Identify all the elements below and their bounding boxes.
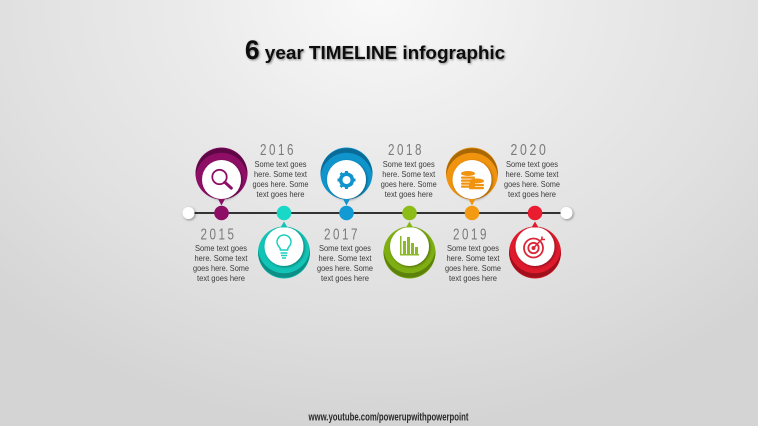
text block 2016: Some text goes xyxy=(254,160,306,169)
icon: coins xyxy=(461,171,484,189)
text block 2019: Some text goes xyxy=(447,244,499,253)
text block 2015 xyxy=(193,244,249,283)
text block 2015: Some text goes xyxy=(195,244,247,253)
year label 2019: 2019 xyxy=(453,226,489,244)
year label 2015: 2015 xyxy=(200,226,236,244)
icon: gear xyxy=(338,171,356,189)
timeline line xyxy=(188,212,567,214)
text block 2019: goes here. Some xyxy=(445,264,501,273)
icon: target xyxy=(524,236,545,258)
icon: bar chart xyxy=(400,236,419,256)
text block 2017 xyxy=(317,244,373,283)
text block 2019 xyxy=(445,244,501,283)
text block 2018: goes here. Some xyxy=(381,180,437,189)
milestone 2016 xyxy=(258,206,310,278)
text block 2020 xyxy=(504,160,560,199)
text block 2018 xyxy=(381,160,437,199)
text block 2015: here. Some text xyxy=(194,254,248,263)
year label 2020: 2020 xyxy=(510,142,548,159)
year label 2016: 2016 xyxy=(260,142,296,159)
year label 2017: 2017 xyxy=(324,226,360,244)
text block 2020: goes here. Some xyxy=(504,180,560,189)
milestone 2018 xyxy=(384,206,436,278)
milestone 2017 xyxy=(320,148,372,220)
text block 2017: Some text goes xyxy=(319,244,371,253)
text block 2017: text goes here xyxy=(321,274,369,283)
text block 2019: here. Some text xyxy=(446,254,500,263)
text block 2017: goes here. Some xyxy=(317,264,373,273)
text block 2018: Some text goes xyxy=(383,160,435,169)
text block 2015: text goes here xyxy=(197,274,245,283)
footer url: www.youtube.com/powerupwithpowerpoint xyxy=(308,412,469,424)
milestone 2020 xyxy=(509,206,561,278)
title: 6 year TIMELINE infographic xyxy=(245,35,505,65)
text block 2017: here. Some text xyxy=(318,254,372,263)
text block 2018: text goes here xyxy=(385,190,433,199)
end point xyxy=(560,207,572,219)
icon: magnifier xyxy=(212,170,231,188)
milestone 2019 xyxy=(446,148,498,220)
text block 2020: here. Some text xyxy=(506,170,559,179)
text block 2020: Some text goes xyxy=(506,160,558,169)
text block 2016: goes here. Some xyxy=(252,180,309,189)
icon: light bulb xyxy=(277,235,291,258)
start point xyxy=(182,207,194,219)
text block 2016 xyxy=(252,160,309,199)
text block 2016: here. Some text xyxy=(254,170,308,179)
text block 2018: here. Some text xyxy=(382,170,436,179)
text block 2016: text goes here xyxy=(256,190,305,199)
milestone 2015 xyxy=(196,148,248,220)
text block 2019: text goes here xyxy=(449,274,497,283)
text block 2020: text goes here xyxy=(508,190,556,199)
text block 2015: goes here. Some xyxy=(193,264,249,273)
year label 2018: 2018 xyxy=(388,142,424,159)
